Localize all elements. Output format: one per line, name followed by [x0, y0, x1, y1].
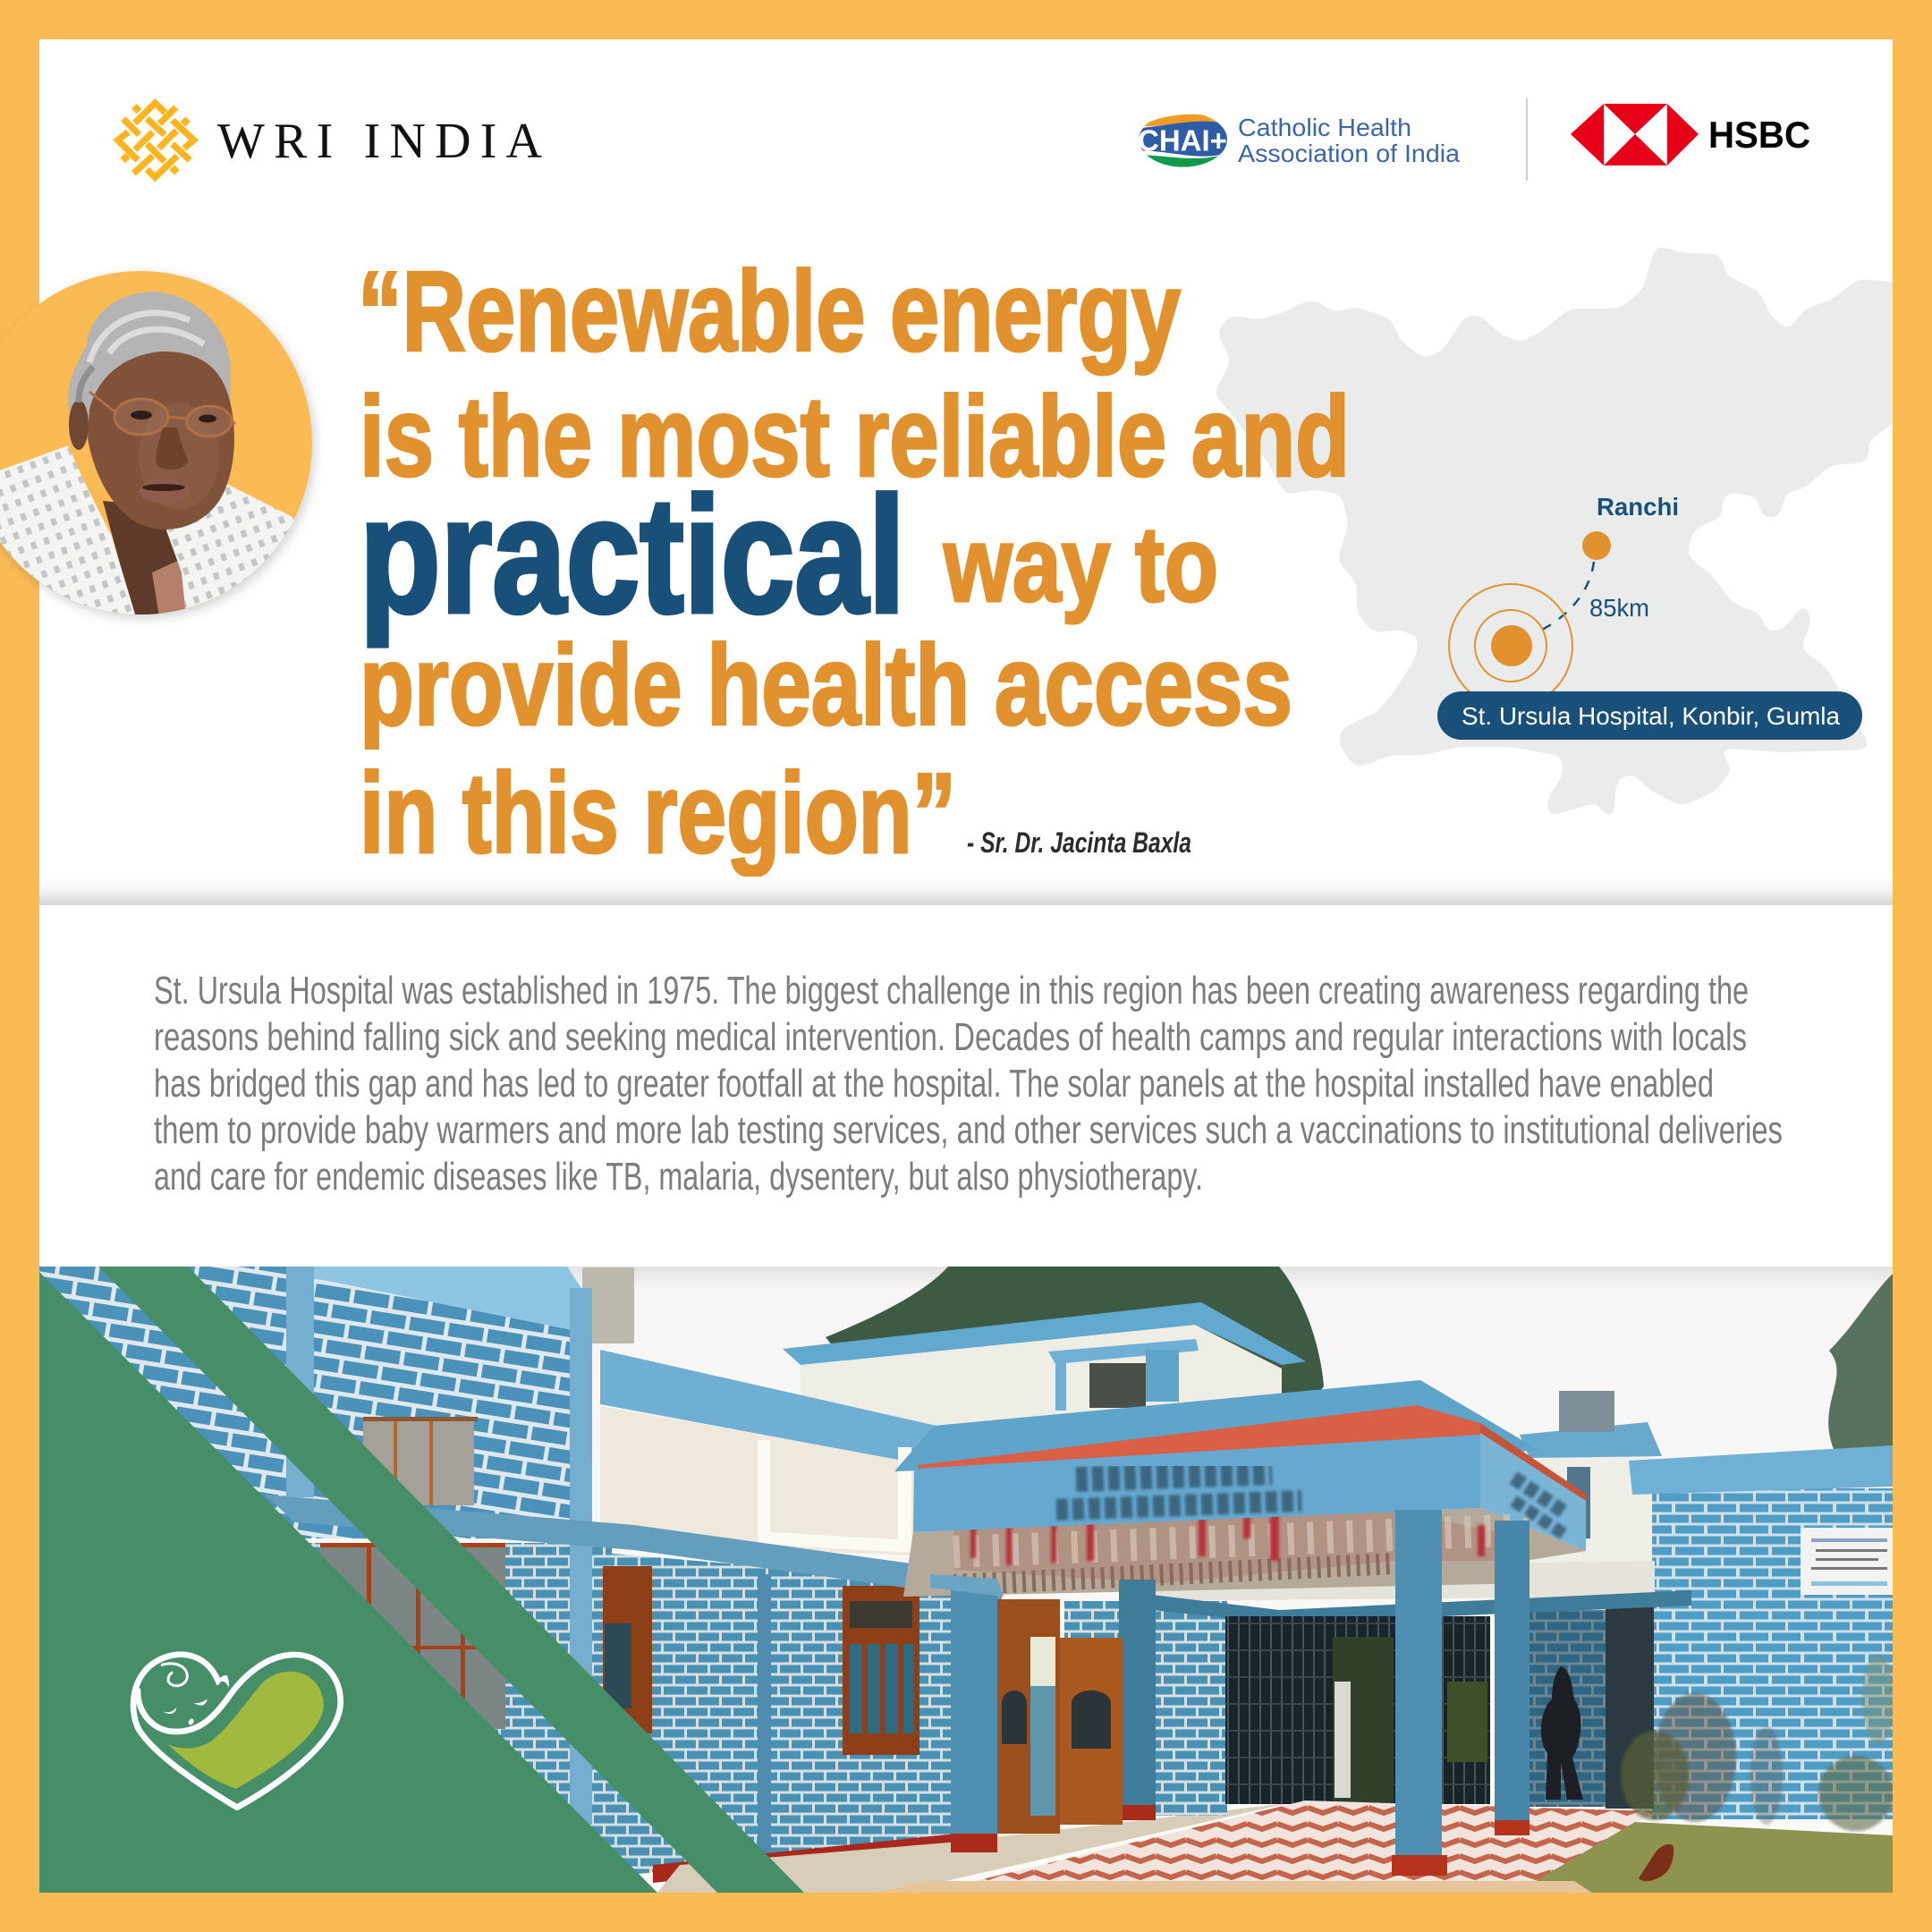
dark left window: [320, 1543, 505, 1729]
quote headline: in this region”: [360, 750, 956, 877]
cheek highlight: [139, 402, 219, 510]
foreground paving: [877, 1881, 1592, 1893]
body paragraph: [154, 969, 1783, 1199]
floor tiles: [975, 1801, 1655, 1881]
bunting: [953, 1512, 1530, 1585]
bushes: [1621, 1655, 1894, 1831]
red plinth: [653, 1834, 957, 1883]
map of Jharkhand: [1218, 250, 1914, 816]
pillars: [930, 1510, 1530, 1876]
white pipes: [758, 1440, 911, 1553]
ceiling: [903, 1508, 1586, 1597]
map markers and labels: [1437, 493, 1862, 740]
back brick walls: [1064, 1601, 1227, 1816]
quote headline: provide health access: [360, 622, 1292, 749]
quote headline: way to: [943, 504, 1218, 624]
left wing beige wall: [600, 1406, 934, 1556]
wooden window centre: [843, 1586, 919, 1755]
view through gate: [1333, 1637, 1487, 1802]
rooster: [1639, 1844, 1674, 1881]
lower left brick wall: [309, 1543, 612, 1827]
portrait of Sr. Dr. Jacinta Baxla: [0, 271, 312, 617]
small rear block: [1520, 1391, 1662, 1568]
body paragraph: and care for endemic diseases like TB, malaria, dysentery, but also physiotherapy.: [154, 1155, 1203, 1199]
portico red roof: [918, 1405, 1480, 1470]
hospital label pill: [1437, 691, 1862, 740]
wooden doors: [997, 1599, 1123, 1834]
grass: [1521, 1822, 1893, 1893]
portico upper roof: [894, 1380, 1540, 1471]
ear: [69, 400, 89, 450]
green diagonal ribbon: [98, 1267, 804, 1893]
divider band: [39, 877, 1893, 905]
quote attribution: - Sr. Dr. Jacinta Baxla: [967, 826, 1191, 859]
icon: CHAI emblem: CHAI+: [1138, 124, 1227, 157]
balcony band: [1156, 1561, 1655, 1601]
left wing blue fascia: [600, 1350, 936, 1467]
green corner triangle: [39, 1272, 657, 1893]
shawl left: [0, 445, 136, 617]
portico side roof edge: [1480, 1423, 1586, 1501]
hair mass: [68, 292, 231, 429]
CHAI name: [1238, 114, 1460, 167]
hospital marker: [1449, 584, 1572, 708]
nose: [156, 428, 188, 470]
blue downpipes: [286, 1267, 771, 1860]
right brick building: [1652, 1488, 1893, 1819]
upper white block: [801, 1325, 1282, 1426]
icon: CHAI emblem: [1139, 114, 1227, 167]
shawl right: [166, 484, 295, 608]
quote headline: is the most reliable and: [360, 373, 1350, 500]
icon: HSBC hexagon: [1571, 104, 1699, 165]
awning ledge: [265, 1495, 1002, 1601]
hair highlights: [79, 313, 204, 402]
portrait background circle: [0, 271, 312, 614]
left window with wood frame: [603, 1566, 652, 1733]
sign board: [1801, 1528, 1893, 1595]
neck and chest: [103, 501, 192, 617]
portico front fascia: [913, 1435, 1480, 1532]
icon: WRI knot: [118, 103, 194, 177]
iron gate: [1225, 1616, 1490, 1804]
eyes: [131, 411, 152, 419]
CHAI name: Catholic Health: [1238, 114, 1411, 141]
left building brick wall: [39, 1267, 572, 1538]
quote headline: practical: [360, 462, 905, 647]
upper-left window: [363, 1417, 478, 1505]
hospital label pill: St. Ursula Hospital, Konbir, Gumla: [1462, 702, 1840, 730]
icon: mother and baby heart: [133, 1655, 341, 1808]
walkway: [657, 1803, 1288, 1893]
HSBC wordmark: HSBC: [1708, 114, 1810, 156]
quote headline: [358, 248, 1350, 877]
glasses: [89, 392, 235, 436]
heart outline: [133, 1655, 341, 1808]
rear ledge: [1152, 1590, 1691, 1623]
portico side fascia: [1480, 1431, 1586, 1551]
mouth: [140, 479, 190, 504]
upper window: [1048, 1339, 1199, 1411]
heart lime fill: [167, 1672, 324, 1789]
rear door: [1606, 1607, 1654, 1809]
Ranchi marker: [1582, 531, 1611, 560]
lower centre brick wall: [592, 1552, 957, 1878]
logo: Catholic Health Association of India: [1139, 114, 1460, 167]
quote headline: “Renewable energy: [358, 248, 1181, 375]
route line: [1535, 562, 1594, 633]
distance label: 85km: [1589, 594, 1649, 622]
person: [1541, 1666, 1583, 1800]
baby face details: [161, 1664, 229, 1725]
CHAI name: Association of India: [1238, 140, 1460, 167]
face: [88, 352, 234, 530]
logo: HSBC: [1571, 104, 1810, 165]
upper roof: [783, 1302, 1306, 1365]
sky: [305, 1267, 1893, 1648]
left building eave: [314, 1267, 581, 1330]
photo: hospital building: [39, 1267, 1894, 1901]
right building roof: [1629, 1445, 1893, 1495]
trees: [826, 1267, 1893, 1449]
concrete box: [582, 1267, 634, 1343]
Ranchi label: Ranchi: [1597, 493, 1679, 521]
WRI India wordmark: WRI INDIA: [217, 114, 543, 169]
logo: WRI India: [118, 103, 543, 177]
portico lettering marks: [1056, 1472, 1565, 1535]
